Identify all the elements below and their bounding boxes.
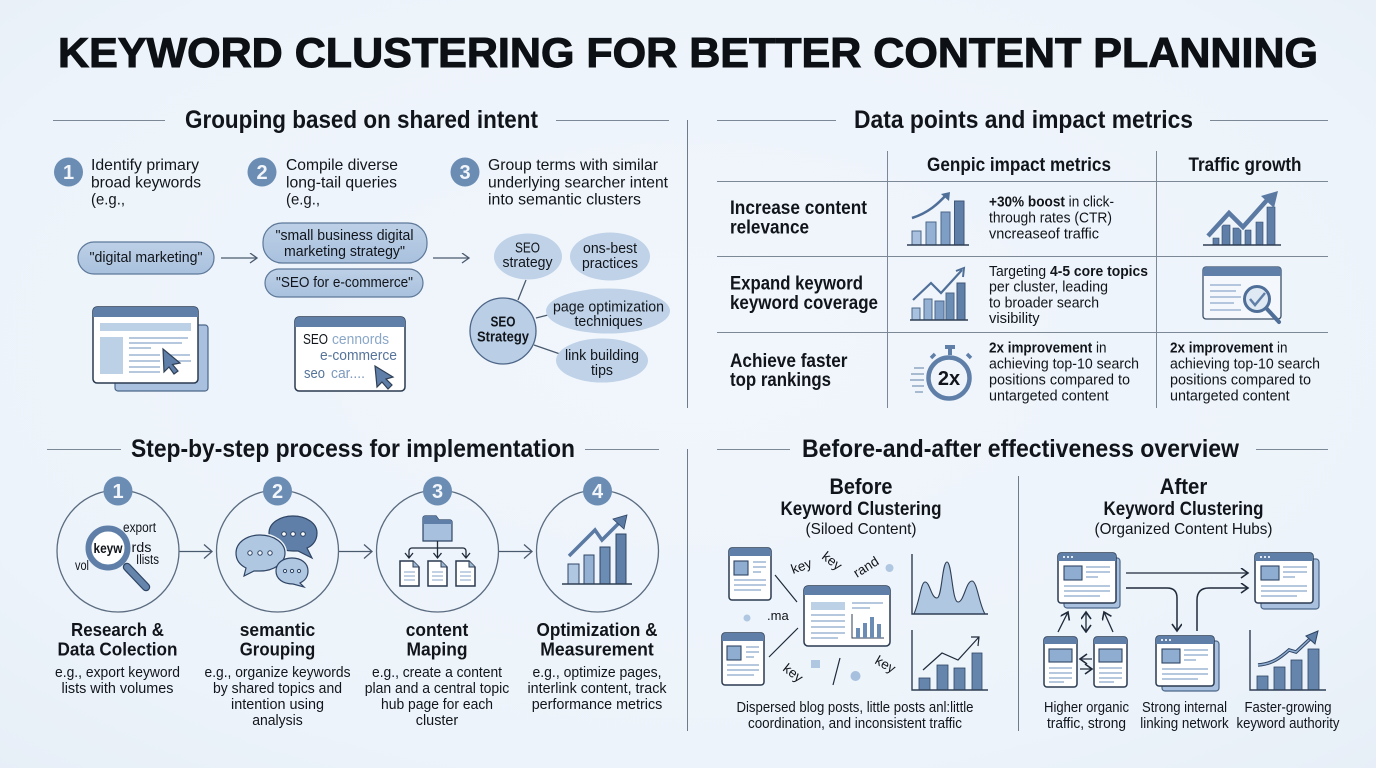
pill: SEO for e-commerce: "SEO for e-commerce" (276, 274, 413, 291)
before heading: Keyword Clustering (780, 499, 942, 520)
step 4: optimization chart (536, 476, 658, 612)
row 1 metric text: through rates (CTR) (989, 211, 1112, 227)
icon: stopwatch 2x: 2x (938, 368, 960, 390)
diagram: semantic cluster: ons-best (583, 240, 638, 257)
heading: step-by-step: Step-by-step process for implementation (131, 435, 575, 463)
step 2: 2 (256, 162, 268, 184)
diagram: semantic cluster: practices (582, 255, 638, 272)
step 3: underlying searcher intent (488, 174, 669, 192)
diagram: semantic cluster: tips (591, 362, 613, 379)
caption: optimization: performance metrics (532, 697, 662, 713)
after caption: faster-growing authority: Faster-growing (1244, 700, 1332, 716)
pill: digital marketing: "digital marketing" (90, 249, 202, 266)
icon: search suggestion window: seo (304, 366, 325, 382)
row 2 metric text: visibility (989, 311, 1040, 327)
row 1 label: Increase content (730, 198, 868, 219)
before: scattered pages diagram: key (819, 549, 845, 573)
icon: stopwatch 2x (910, 345, 971, 398)
step 1: broad keywords (91, 174, 201, 192)
before heading: Before (830, 474, 892, 499)
pill: digital marketing (78, 242, 214, 274)
caption: research: lists with volumes (62, 681, 174, 697)
row 2 metric text: per cluster, leading (989, 280, 1108, 296)
caption: content mapping: e.g., create a content (372, 665, 502, 681)
after heading: After (1160, 474, 1208, 499)
pill: SEO for e-commerce (265, 269, 423, 297)
icon: browser window with cursor (93, 307, 208, 391)
caption: semantic grouping (204, 619, 350, 729)
step 1: (e.g., (91, 192, 125, 208)
heading: before and after: Before-and-after effectiveness overview (802, 435, 1240, 463)
row 3 metric text: positions compared to (989, 372, 1130, 388)
row 2 metric text (989, 264, 1148, 327)
row 1 metric text: vncreaseof traffic (989, 227, 1100, 243)
row 2 metric text: Targeting 4-5 core topics (989, 264, 1148, 280)
caption: content mapping (365, 619, 510, 729)
row 2 label (730, 274, 878, 314)
step 1: research: vol (75, 558, 89, 573)
diagram: semantic cluster: page optimization (553, 298, 664, 316)
process arrows (179, 544, 532, 558)
caption: research: Data Colection (58, 638, 178, 660)
row 3 traffic text: untargeted content (1170, 389, 1290, 405)
icon: search suggestion window (295, 317, 405, 391)
icon: search suggestion window: SEO (303, 332, 328, 348)
row 3 metric text (989, 341, 1139, 405)
row 3 label: top rankings (730, 370, 831, 391)
row 3 traffic text (1170, 341, 1320, 405)
caption: content mapping: content (406, 619, 468, 640)
after caption: strong internal linking: linking network (1140, 716, 1229, 732)
step 2: Compile diverse (286, 157, 398, 174)
caption: optimization: Measurement (540, 638, 654, 660)
caption: optimization (528, 619, 667, 713)
caption: optimization: Optimization & (536, 619, 658, 640)
before: scattered pages diagram: rand (851, 553, 882, 581)
before: scattered pages diagram: .ma (767, 608, 789, 623)
caption: semantic grouping: by shared topics and (213, 681, 342, 697)
step 3: content map: 3 (432, 481, 443, 503)
column header: traffic growth: Traffic growth (1188, 155, 1302, 176)
caption: semantic grouping: analysis (252, 713, 303, 729)
before: scattered pages diagram: key (780, 661, 806, 685)
diagram: semantic cluster: SEO (490, 314, 516, 330)
caption: semantic grouping: intention using (231, 697, 324, 713)
before heading (780, 474, 942, 538)
after: growth chart (1250, 630, 1326, 690)
row 2 metric text: to broader search (989, 296, 1099, 312)
caption: content mapping: plan and a central topic (365, 681, 510, 697)
pill: small business digital marketing strategy: marketing strategy" (284, 243, 405, 260)
after caption: higher organic traffic: traffic, strong (1047, 716, 1126, 732)
row 3 traffic text: achieving top-10 search (1170, 356, 1320, 372)
row 2 label: Expand keyword (730, 274, 863, 294)
caption: research (55, 619, 180, 697)
step 2 (248, 157, 398, 208)
before caption: coordination, and inconsistent traffic (748, 716, 962, 732)
after caption: faster-growing authority: keyword authority (1236, 716, 1340, 732)
arrow: pill to queries (221, 257, 257, 259)
row 3 metric text: untargeted content (989, 389, 1109, 405)
before: scattered pages diagram (722, 548, 898, 685)
arrow: queries to cluster (433, 257, 469, 259)
step 1: Identify primary (91, 157, 199, 174)
before caption (736, 700, 974, 732)
icon: bars with zigzag arrow (910, 268, 968, 320)
step 3: into semantic clusters (488, 192, 641, 208)
after heading: Keyword Clustering (1104, 499, 1264, 520)
diagram: semantic cluster: techniques (574, 313, 642, 330)
after caption: strong internal linking (1140, 700, 1229, 732)
diagram: semantic cluster (470, 232, 670, 382)
step 3: 3 (459, 162, 471, 184)
after caption: faster-growing authority (1236, 700, 1340, 732)
row 3 metric text: achieving top-10 search (989, 356, 1139, 372)
step 2: chat bubbles: 2 (272, 481, 283, 503)
row 2 label: keyword coverage (730, 293, 878, 314)
row 1 label: relevance (730, 218, 809, 238)
caption: semantic grouping: Grouping (240, 638, 315, 660)
before caption: Dispersed blog posts, little posts anl:little (736, 700, 974, 716)
pill: small business digital marketing strategy (263, 223, 427, 263)
panel: step-by-step process (47, 435, 667, 729)
caption: semantic grouping: e.g., organize keywords (204, 665, 350, 681)
before: area chart (912, 554, 988, 614)
row 1 metric text: +30% boost in click- (989, 195, 1114, 211)
panel: grouping based on shared intent (53, 106, 670, 391)
before: scattered pages diagram: key (789, 555, 814, 577)
row 3 metric text: 2x improvement in (989, 341, 1106, 357)
icon: search suggestion window: car.... (331, 366, 365, 382)
panel: data points and impact metrics (717, 106, 1328, 408)
diagram: semantic cluster: link building (565, 347, 639, 364)
before heading: (Siloed Content) (806, 521, 916, 538)
step 3: content map (376, 476, 498, 612)
after: linked pages diagram (1044, 553, 1319, 691)
step 1: research (57, 476, 179, 612)
after caption: strong internal linking: Strong internal (1142, 700, 1227, 716)
caption: content mapping: Maping (406, 638, 468, 660)
after caption: higher organic traffic (1044, 700, 1129, 732)
row 3 traffic text: positions compared to (1170, 372, 1311, 388)
caption: semantic grouping: semantic (240, 619, 315, 640)
diagram: semantic cluster: Strategy (477, 328, 530, 346)
step 3: Group terms with similar (488, 157, 659, 174)
heading: grouping: Grouping based on shared intent (185, 106, 539, 134)
step 1: 1 (63, 162, 74, 184)
pill: small business digital marketing strategy: "small business digital (276, 227, 414, 244)
icon: rising bars with curve (907, 192, 969, 245)
caption: optimization: interlink content, track (528, 681, 667, 697)
before: bar chart with arrow (912, 630, 988, 690)
panel: before and after (717, 435, 1340, 732)
caption: content mapping: cluster (416, 713, 458, 729)
caption: research: Research & (71, 619, 164, 640)
step 1 (54, 157, 201, 208)
after heading (1094, 474, 1272, 538)
before: scattered pages diagram: key (872, 653, 898, 676)
caption: optimization: e.g., optimize pages, (532, 665, 662, 681)
icon: search suggestion window: cennords (332, 332, 389, 348)
heading: data points: Data points and impact metrics (854, 106, 1193, 134)
icon: search window with checkmark (1203, 267, 1281, 322)
after caption: higher organic traffic: Higher organic (1044, 700, 1129, 716)
caption: research: e.g., export keyword (55, 665, 180, 681)
step 1: research: export (123, 520, 156, 535)
title: KEYWORD CLUSTERING FOR BETTER CONTENT PLANNING (58, 29, 1318, 76)
after heading: (Organized Content Hubs) (1094, 521, 1272, 538)
step 1: research: rds (132, 540, 152, 555)
step 1: research: keyw (94, 540, 123, 556)
icon: traffic growth chart (1203, 191, 1281, 245)
icon: search suggestion window: e-commerce (320, 348, 397, 364)
diagram: semantic cluster: SEO (515, 240, 540, 256)
row 1 label (730, 198, 868, 238)
row 3 traffic text: 2x improvement in (1170, 341, 1288, 357)
step 1: research: Ilists (136, 552, 159, 567)
caption: content mapping: hub page for each (381, 697, 493, 713)
step 2: long-tail queries (286, 174, 397, 192)
step 1: research: 1 (112, 481, 124, 503)
row 1 metric text (989, 195, 1114, 243)
column header: genpic impact metrics: Genpic impact metrics (927, 155, 1111, 176)
step 3 (450, 157, 669, 208)
row 3 label: Achieve faster (730, 351, 848, 372)
row 3 label (730, 351, 848, 391)
diagram: semantic cluster: strategy (502, 254, 553, 271)
step 2: (e.g., (286, 192, 320, 208)
step 2: chat bubbles (216, 476, 338, 612)
step 4: optimization chart: 4 (592, 481, 604, 503)
